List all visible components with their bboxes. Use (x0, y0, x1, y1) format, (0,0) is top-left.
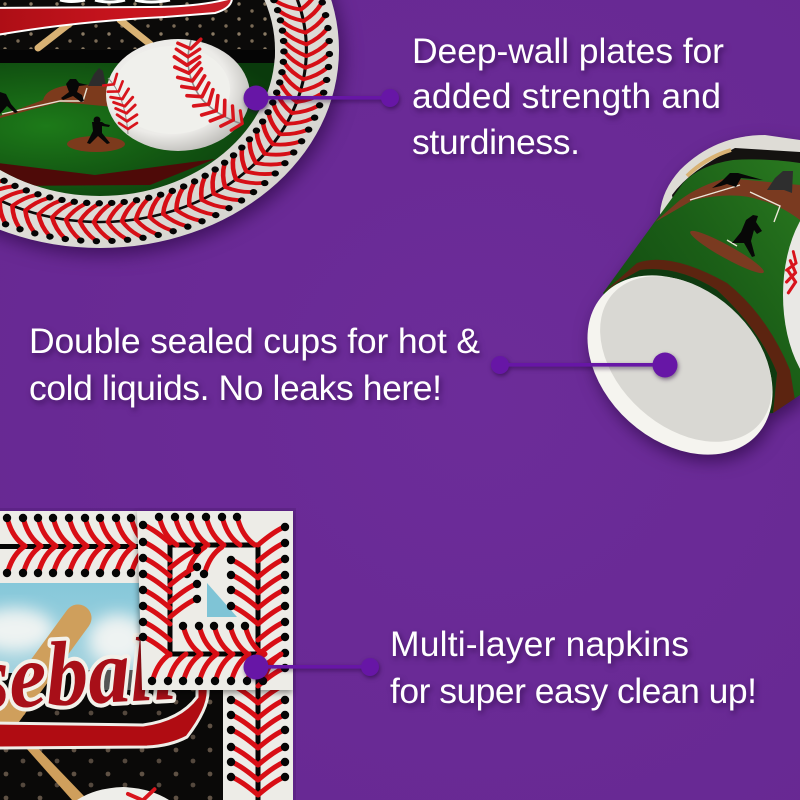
printed artwork (0, 583, 224, 800)
cup rim (660, 135, 800, 240)
pitcher mound (67, 136, 125, 152)
cup base (552, 239, 800, 491)
panel: baseball paper plate (0, 0, 339, 248)
napkin shadow (0, 508, 296, 800)
black seam (170, 545, 262, 690)
pitcher mound (690, 230, 764, 274)
cup interior (672, 148, 800, 240)
plate centre artwork (0, 0, 280, 203)
plate seam stitching (0, 0, 333, 244)
folded corner (137, 511, 293, 690)
outfield dirt band (603, 260, 795, 413)
text: cups: Double sealed cups for hot & (29, 321, 480, 361)
lower-right seam band (223, 690, 290, 800)
baseball on cup (783, 221, 800, 369)
text: plates: Deep-wall plates for (412, 31, 724, 71)
text: plates: added strength and (412, 76, 721, 116)
text: plates: sturdiness. (412, 122, 580, 162)
baseball (77, 787, 169, 800)
text: cups: cold liquids. No leaks here! (29, 368, 442, 408)
panel: napkin (0, 508, 296, 800)
napkin sheet (0, 511, 293, 800)
bat inside cup (687, 150, 731, 176)
cup base inset (568, 243, 800, 475)
panel: paper cup (582, 134, 800, 470)
fold window (207, 583, 237, 617)
player silhouettes (0, 68, 110, 144)
callout: plate connector (244, 86, 399, 110)
cup players (712, 171, 793, 257)
callout: napkin connector (244, 654, 379, 680)
baseball on plate (103, 39, 250, 151)
cup body (603, 159, 800, 424)
plate rim (0, 0, 339, 248)
text: napkins: Multi-layer napkins (390, 624, 689, 664)
dark grass edge (617, 269, 777, 420)
bats (38, 20, 150, 48)
red banner (0, 0, 233, 36)
infield dirt (655, 178, 800, 222)
fold stitches (139, 513, 289, 686)
top-left seam band (0, 514, 149, 577)
red swoosh (0, 688, 208, 748)
text: napkins: for super easy clean up! (390, 671, 757, 711)
callout: cup connector (491, 352, 678, 378)
infield dirt (0, 84, 108, 118)
bat (8, 618, 78, 714)
base lines (690, 185, 780, 246)
